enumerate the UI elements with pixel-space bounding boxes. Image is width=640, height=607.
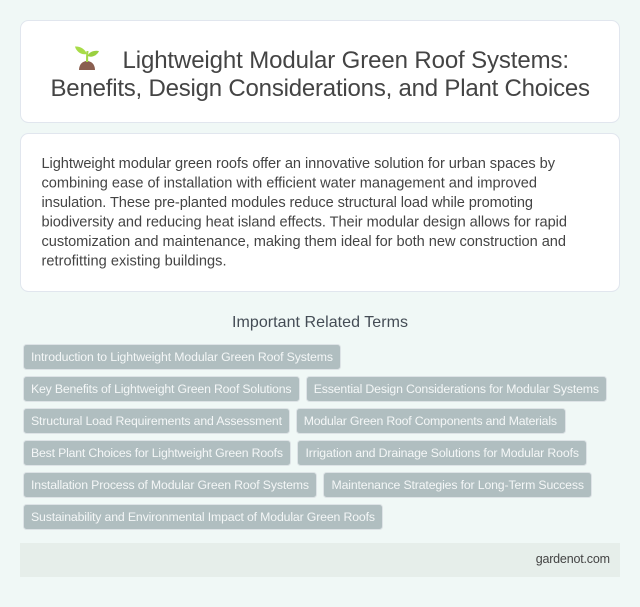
description text: retrofitting existing buildings. — [42, 254, 226, 270]
chip: components — [296, 408, 566, 434]
chip group: related terms — [24, 344, 606, 530]
footer — [20, 543, 620, 577]
chip: irrigation — [298, 440, 586, 466]
chip: plant choices: Best Plant Choices for Lightweight Green Roofs — [31, 446, 283, 460]
description text: Lightweight modular green roofs offer an innovative solution for urban spaces by — [42, 156, 556, 172]
chip: installation — [24, 472, 316, 498]
description text: biodiversity and reducing heat island effects. Their modular design allows for rapid — [42, 214, 567, 230]
chip: maintenance — [324, 472, 592, 498]
title card — [20, 20, 620, 122]
chip: installation: Installation Process of Modular Green Roof Systems — [31, 478, 309, 492]
chip: introduction: Introduction to Lightweight Modular Green Roof Systems — [31, 350, 333, 364]
chip: sustainability: Sustainability and Environmental Impact of Modular Green Roofs — [31, 510, 375, 524]
title line 2: Benefits, Design Considerations, and Plant Choices — [50, 75, 590, 102]
chip: components: Modular Green Roof Components and Materials — [304, 414, 557, 428]
chip: design considerations — [306, 376, 606, 402]
icon: sprout — [75, 46, 99, 70]
chip: key benefits: Key Benefits of Lightweight Green Roof Solutions — [31, 382, 292, 396]
footer source text: gardenot.com — [536, 552, 610, 566]
chip: irrigation: Irrigation and Drainage Solutions for Modular Roofs — [306, 446, 579, 460]
chip: plant choices — [24, 440, 290, 466]
description text: customization and maintenance, making them ideal for both new construction and — [42, 234, 566, 250]
description text: insulation. These pre-planted modules reduce structural load while promoting — [42, 195, 533, 211]
panel: description — [20, 134, 620, 292]
chip: maintenance: Maintenance Strategies for Long-Term Success — [332, 478, 584, 492]
description text — [42, 156, 567, 270]
chip: key benefits — [24, 376, 300, 402]
chip: introduction — [24, 344, 340, 370]
chip: structural load — [24, 408, 290, 434]
chip: structural load: Structural Load Requirements and Assessment — [31, 414, 283, 428]
chip: design considerations: Essential Design Considerations for Modular Systems — [314, 382, 599, 396]
heading: important related terms: Important Related Terms — [232, 314, 408, 331]
description text: combining ease of installation with efficient water management and improved — [42, 176, 537, 192]
chip: sustainability — [24, 504, 382, 530]
title line 1: Lightweight Modular Green Roof Systems: — [122, 47, 569, 74]
